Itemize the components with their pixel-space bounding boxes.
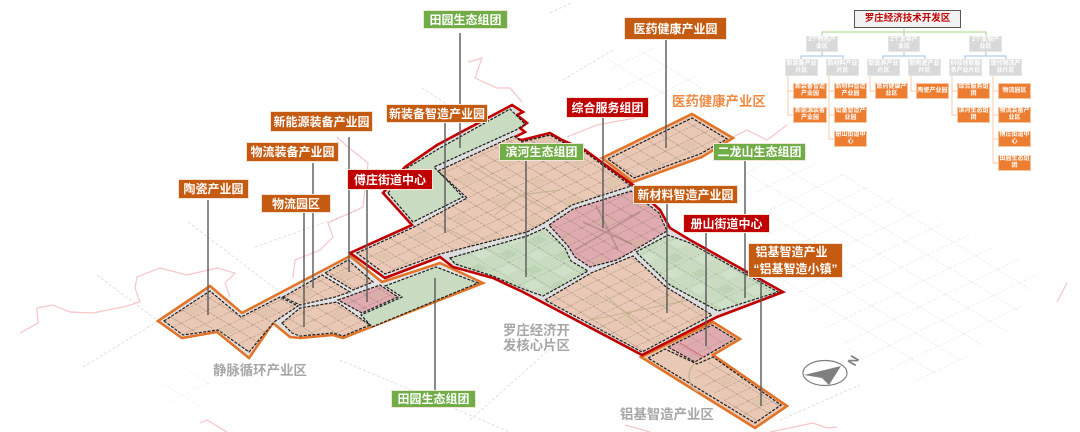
zone: Luozhuang core area xyxy=(350,105,783,355)
label: Ceshan street centre xyxy=(683,214,770,233)
level 4 boxes: 医药健康产 xyxy=(876,84,906,90)
zone: Binhe ecological group xyxy=(450,228,588,296)
label: Tianyuan group bottom xyxy=(391,390,476,408)
level 4 boxes: 物流装备产 xyxy=(999,108,1030,114)
level 4 boxes: 册山街道中 xyxy=(835,132,866,138)
label: Erlongshan ecological group: 二龙山生态组团 xyxy=(717,145,802,159)
compass: N xyxy=(844,353,862,368)
level 4 boxes: 团 xyxy=(970,115,976,121)
org chart connectors xyxy=(788,28,1006,163)
level 4 boxes: 陶瓷产业园 xyxy=(917,88,948,94)
label: Medical health park: 医药健康产业园 xyxy=(633,22,718,36)
level 2 boxes: 片区 xyxy=(877,68,890,74)
label: Ceshan street centre: 册山街道中心 xyxy=(690,216,762,230)
label: Aluminium-based town xyxy=(748,243,843,278)
zone: Tianyuan north xyxy=(388,109,525,222)
level 2 boxes: 新材料产业 xyxy=(827,60,858,66)
level 4 boxes: 物流园区 xyxy=(1002,88,1026,94)
zone: New materials industrial park xyxy=(545,256,712,352)
level 2 boxes: 新陶瓷产业 xyxy=(909,60,940,66)
label: Comprehensive service group: 综合服务组团 xyxy=(571,100,644,114)
level 4 boxes: 滨河生态组 xyxy=(958,108,988,114)
level 2 boxes: 业片区 xyxy=(996,68,1014,74)
label: New energy equipment park: 新能源装备产业园 xyxy=(273,114,370,128)
level 4 boxes: 新材料智造 xyxy=(835,84,866,90)
label: Tianyuan group bottom: 田园生态组团 xyxy=(397,392,470,406)
zone: New equipment industrial park xyxy=(357,135,631,274)
label: New equipment park xyxy=(386,104,488,123)
label: Medical health park xyxy=(624,17,727,40)
level 4 boxes xyxy=(793,83,1031,171)
level 4 boxes: 产业园 xyxy=(801,115,819,121)
leader lines xyxy=(208,33,761,406)
label: Aluminium-based town: 铝基智造产业 xyxy=(755,244,828,258)
label: New equipment park: 新装备智造产业园 xyxy=(389,106,485,120)
label: Tianyuan group top xyxy=(423,10,508,29)
level 2 boxes: 2个支撑产 xyxy=(972,37,999,43)
level 2 boxes: 业区 xyxy=(979,44,992,50)
level 2 boxes xyxy=(785,36,1022,76)
level 2 boxes: 业区 xyxy=(816,44,828,50)
zone: Aluminium-based industrial area xyxy=(641,322,787,428)
level 2 boxes: 新装备产业 xyxy=(786,60,816,66)
label: New materials park: 新材料智造产业园 xyxy=(637,188,734,202)
zone: Fuzhuang centre xyxy=(338,285,398,313)
zone: Medical health industrial area xyxy=(602,114,733,182)
level 4 boxes: 傅庄街道中 xyxy=(999,132,1030,138)
label: Tianyuan group top: 田园生态组团 xyxy=(429,12,502,26)
level 4 boxes: 综合服务组 xyxy=(958,84,988,90)
text: Jingmai circular industry area: 静脉循环产业区 xyxy=(213,363,307,378)
label: Logistics park: 物流园区 xyxy=(272,196,320,210)
level 4 boxes: 团 xyxy=(1011,163,1018,169)
label: Fuzhuang street centre: 傅庄街道中心 xyxy=(354,172,426,186)
label: Ceramics park xyxy=(178,179,249,199)
level 2 boxes: 2个主导产 xyxy=(890,37,918,43)
text: Medical health industrial area: 医药健康产业区 xyxy=(672,94,766,109)
zone: Comprehensive service group xyxy=(549,191,667,267)
label: Logistics equipment park: 物流装备产业园 xyxy=(250,145,334,159)
level 2 boxes: 片区 xyxy=(918,68,930,74)
level 2 boxes: 业区 xyxy=(898,44,910,50)
org chart title: 罗庄经济技术开发区 xyxy=(865,13,950,24)
label: Aluminium-based town: “铝基智造小镇” xyxy=(753,262,838,276)
label: New energy equipment park xyxy=(270,111,373,132)
label: Comprehensive service group xyxy=(566,97,649,118)
label: Fuzhuang street centre xyxy=(347,169,433,190)
label: Logistics equipment park xyxy=(246,142,339,162)
org chart xyxy=(785,10,1031,171)
level 4 boxes: 团 xyxy=(970,91,976,97)
level 4 boxes: 产业园 xyxy=(801,91,819,97)
level 4 boxes: 田园生态组 xyxy=(999,156,1030,162)
zone: Tianyuan south-west xyxy=(361,267,478,327)
level 2 boxes: 科技创新服 xyxy=(950,60,980,66)
compass xyxy=(803,353,862,386)
level 2 boxes: 2个特色产 xyxy=(808,37,836,43)
level 2 boxes: 务产业片区 xyxy=(950,68,980,74)
level 2 boxes: 现代物流产 xyxy=(990,60,1020,66)
level 2 boxes: 片区 xyxy=(795,68,808,74)
label: New materials park xyxy=(633,185,738,204)
level 4 boxes: 心 xyxy=(1011,139,1018,145)
label: Logistics park xyxy=(261,194,331,213)
label: Ceramics park: 陶瓷产业园 xyxy=(183,182,244,196)
zone: Jingmai circular industry area xyxy=(158,256,483,358)
level 4 boxes: 心 xyxy=(847,139,854,145)
zone: Erlongshan ecological group xyxy=(636,235,778,311)
org chart title xyxy=(854,10,961,28)
text: Aluminium-based industrial area: 铝基智造产业区 xyxy=(620,407,714,422)
text: Luozhuang core area xyxy=(503,323,570,353)
label: Binhe ecological group xyxy=(499,143,584,161)
level 4 boxes: 业区 xyxy=(1008,115,1020,121)
level 4 boxes: 业区 xyxy=(885,91,898,97)
text: Luozhuang core area: 发核心片区 xyxy=(503,338,570,353)
level 4 boxes: 新能源装备 xyxy=(795,108,825,114)
label: Binhe ecological group: 滨河生态组团 xyxy=(505,145,578,159)
level 2 boxes: 片区 xyxy=(836,68,848,74)
level 4 boxes: 铝基智造产 xyxy=(835,108,866,114)
text: Luozhuang core area: 罗庄经济开 xyxy=(503,323,570,338)
level 2 boxes: 新医养产业 xyxy=(868,60,898,66)
level 4 boxes: 产业园 xyxy=(841,91,860,97)
level 4 boxes: 新装备智造 xyxy=(795,84,825,90)
level 4 boxes: 业园 xyxy=(844,115,856,121)
